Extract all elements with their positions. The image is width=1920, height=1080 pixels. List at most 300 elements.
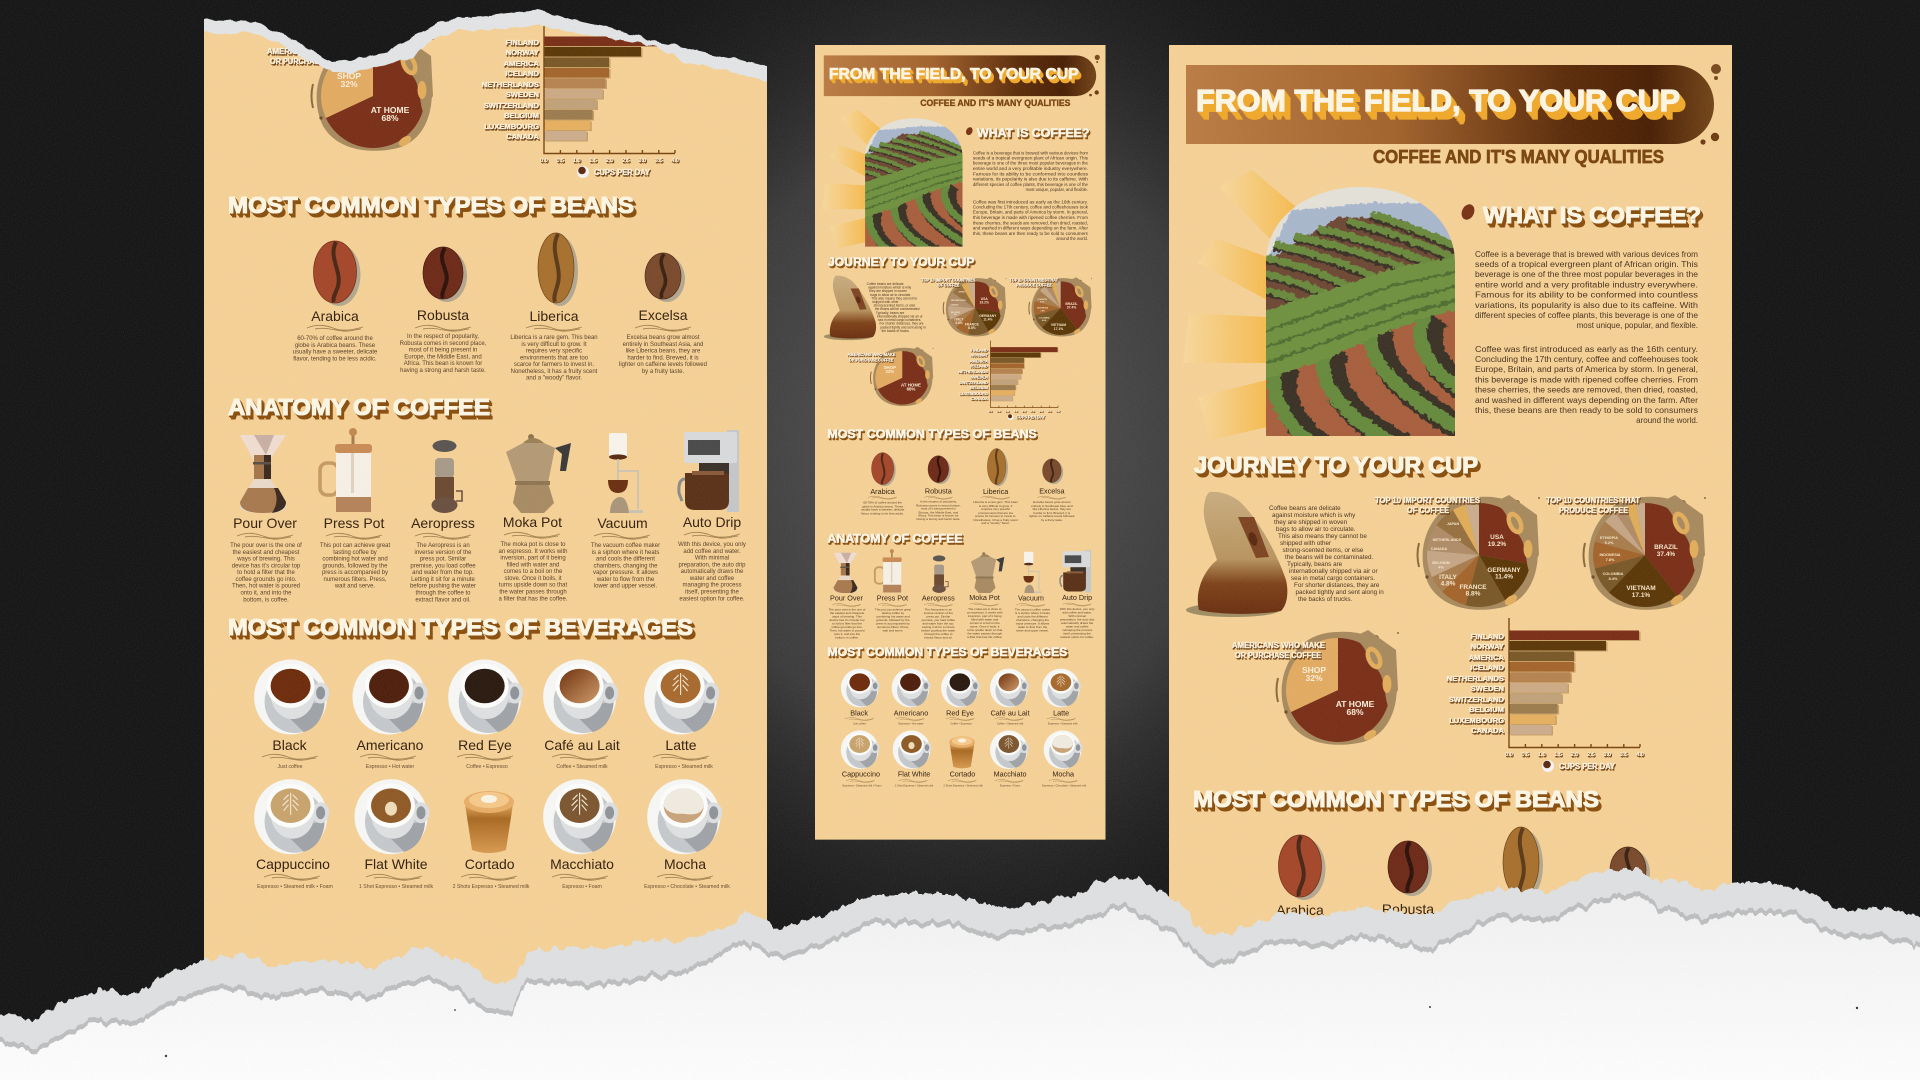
bean: Excelsa: harder to find. Brewed, it is xyxy=(1034,511,1071,515)
drink: Cortado: 2 Shots Espresso • Steamed milk xyxy=(943,783,984,787)
bean: Robusta: Africa. This bean is known for xyxy=(918,514,958,518)
drink: Black xyxy=(841,669,879,726)
brewer: Moka Pot: filled with water and xyxy=(507,562,559,568)
drink: Red Eye: Red Eye xyxy=(946,708,974,717)
brewer: Auto Drip: With this device, you only xyxy=(1060,607,1095,611)
drink: Americano xyxy=(352,660,426,770)
bean: Arabica: globe is Arabica beans. These xyxy=(862,504,903,508)
bar chart: cups per day: 4.0 xyxy=(1636,752,1644,758)
bar chart: cups per day: 2.5 xyxy=(622,158,630,164)
bar chart: cups per day: LUXEMBOURG xyxy=(1449,716,1504,725)
bar chart: cups per day: 2.0 xyxy=(1022,409,1027,413)
pie chart: top 10 import countries: GERMANY xyxy=(1487,567,1521,574)
bean: Liberica: is very difficult to grow. It xyxy=(979,504,1012,508)
sun rays xyxy=(1183,170,1296,440)
bean: Robusta: In the respect of popularity, xyxy=(920,500,957,504)
bar chart: cups per day: 1.0 xyxy=(1538,752,1546,758)
brewer: Aeropress: premise, you load coffee xyxy=(922,618,955,622)
bean: Arabica: flavor, tending to be less acidic. xyxy=(293,356,377,362)
bean: Arabica: Arabica xyxy=(311,308,359,324)
text: journey description xyxy=(867,282,926,333)
bar chart: cups per day: 1.0 xyxy=(573,158,581,164)
pie chart: make or purchase coffee: 68% xyxy=(1346,707,1364,717)
drink: Black: Black xyxy=(850,708,868,717)
bean: Robusta xyxy=(916,456,961,521)
bean: Liberica: Nonetheless, it has a fruity scent xyxy=(511,369,598,375)
bean: Robusta xyxy=(400,247,487,374)
heading: anatomy of coffee: ANATOMY OF COFFEE xyxy=(228,394,490,420)
brewer: Auto Drip: add coffee and water. xyxy=(683,549,741,555)
drink: Red Eye: Red Eye xyxy=(458,737,512,753)
text: journey description: shipped with other xyxy=(872,300,900,304)
text: what is coffee paragraph 2: this beverage is made with ripened coffee cherries. From xyxy=(973,215,1089,220)
pie chart: top 10 import countries: JAPAN xyxy=(958,291,965,294)
bean: Arabica: Arabica xyxy=(870,487,896,496)
pie chart: top 10 producing countries: INDONESIA xyxy=(1037,307,1049,310)
drink: Cortado: 2 Shots Espresso • Steamed milk xyxy=(453,884,530,890)
pie chart: top 10 import countries: FRANCE xyxy=(1459,584,1487,591)
brewer: Vacuum: Vacuum xyxy=(1018,594,1044,603)
bar chart: cups per day: AMERICA xyxy=(1469,653,1505,662)
drink: Flat White: 1 Shot Espresso • Steamed milk xyxy=(359,884,433,890)
pie chart: top 10 import countries: 11.4% xyxy=(983,317,993,321)
text: journey description: they are shipped in woven xyxy=(869,289,907,293)
pie chart: make or purchase coffee: AT HOME xyxy=(901,383,921,388)
text: what is coffee paragraph 2: this, these beans are then ready to be sold to consumers xyxy=(973,231,1088,236)
brewer: Press Pot: combining hot water and xyxy=(876,615,910,619)
brewer: Pour Over: device has it's circular top xyxy=(232,563,301,569)
brewer: Vacuum: water to flow from the xyxy=(596,577,655,583)
text: what is coffee paragraph 1: beverage is one of the three most popular beverages in the xyxy=(973,161,1089,166)
bar chart: cups per day: CANADA xyxy=(1471,726,1505,735)
bean: Arabica xyxy=(1276,835,1326,918)
pie chart: top 10 import countries: BELGIUM xyxy=(1432,561,1450,565)
bar chart: cups per day xyxy=(482,24,679,178)
brewer: Aeropress: Aeropress xyxy=(922,594,955,603)
pie chart: top 10 producing countries xyxy=(1010,277,1092,336)
text: journey description: Coffee beans are delicate xyxy=(1269,505,1341,512)
drink: Cafe au Lait xyxy=(990,669,1030,726)
text: what is coffee paragraph 2: and washed in different ways depending on the farm. After xyxy=(973,226,1089,231)
text: what is coffee paragraph 1: entire world and a very profitable industry everywhere. xyxy=(973,166,1088,171)
text: what is coffee paragraph 2: around the world. xyxy=(1056,236,1088,241)
pie chart: make or purchase coffee: AT HOME xyxy=(371,105,410,115)
text: what is coffee paragraph 1: most unique, popular, and flexible. xyxy=(1577,321,1698,330)
coffee farm arch illustration xyxy=(859,113,969,254)
bean: Excelsa xyxy=(619,253,707,375)
bar chart: cups per day: NORWAY xyxy=(1471,642,1504,651)
brewer: Auto Drip: With minimal xyxy=(1068,614,1086,618)
bar chart: cups per day: CANADA xyxy=(971,396,988,401)
pie chart: top 10 import countries: NETHERLANDS xyxy=(1433,538,1462,542)
drink: Mocha: Espresso • Chocolate • Steamed milk xyxy=(644,884,730,890)
pie chart: top 10 producing countries: VIETNAM xyxy=(1051,323,1066,327)
bean: Robusta: Africa. This bean is known for xyxy=(404,361,482,367)
bar chart: cups per day: 4.0 xyxy=(1056,409,1060,413)
brewer: Press Pot: press is accompanied by xyxy=(322,570,388,576)
header banner xyxy=(824,55,1100,96)
drink: Mocha xyxy=(1042,730,1087,787)
brewer: Press Pot: grounds, followed by the xyxy=(876,618,910,622)
bar chart: cups per day: 0.5 xyxy=(557,158,564,164)
pie chart: top 10 producing countries: 7.8% xyxy=(1606,558,1615,562)
heading: what is coffee: WHAT IS COFFEE? xyxy=(1483,202,1701,228)
brewer: Pour Over: The pour over is the one of xyxy=(230,543,302,549)
brewer: Vacuum: lower and upper vessel. xyxy=(1016,629,1049,633)
drink: Red Eye xyxy=(941,669,979,726)
brewer: Moka Pot: comes to a boil on the xyxy=(504,569,563,575)
pie chart: top 10 producing countries: 7.8% xyxy=(1040,310,1045,312)
brewer: Aeropress: Letting it sit for a minute xyxy=(922,625,955,629)
pie chart: top 10 import countries: JAPAN xyxy=(1447,522,1460,526)
bar chart: cups per day: ICELAND xyxy=(970,363,988,368)
bar chart: cups per day: CUPS PER DAY xyxy=(1559,762,1616,771)
text: what is coffee paragraph 2: this beverage is made with ripened coffee cherries. From xyxy=(1475,376,1698,384)
brewer: Vacuum: chambers, changing the xyxy=(1016,618,1049,622)
text: what is coffee paragraph 2: Concluding the 17th century, coffee and coffeehouses took xyxy=(1475,355,1699,364)
bar chart: cups per day: 1.5 xyxy=(589,158,597,164)
brewer: Aeropress: premise, you load coffee xyxy=(410,563,476,569)
bar chart: cups per day: AMERICA xyxy=(970,358,988,363)
text: journey description: the backs of trucks. xyxy=(882,329,910,333)
icon: bean bullet xyxy=(965,126,974,136)
bean: Excelsa: entirely in Southeast Asia, and xyxy=(623,342,703,348)
text: journey description: For shorter distances, they are xyxy=(880,322,924,326)
pie chart: top 10 producing countries: 5.2% xyxy=(1605,541,1614,545)
heading: journey to your cup: JOURNEY TO YOUR CUP xyxy=(1194,452,1478,478)
bar chart: cups per day: NETHERLANDS xyxy=(958,369,988,374)
bean: Robusta: In the respect of popularity, xyxy=(407,334,479,340)
pie chart: top 10 import countries: 19.2% xyxy=(980,301,989,305)
text: journey description: strong-scented items, or else xyxy=(1282,547,1364,554)
brewer: Pour Over: the easiest and cheapest xyxy=(830,611,864,615)
brewer: Aeropress: extract flavor and oil. xyxy=(924,636,953,640)
drink: Mocha: Mocha xyxy=(1052,770,1075,779)
bar chart: cups per day: SWITZERLAND xyxy=(959,380,988,385)
brewer: Press Pot: Press Pot xyxy=(324,515,384,531)
bar chart: cups per day: CUPS PER DAY xyxy=(594,168,651,177)
bean: Robusta: Robusta comes in second place, xyxy=(916,503,961,507)
text: journey description: they are shipped in woven xyxy=(1274,519,1348,526)
brewer: Moka Pot: inversion, part of it being xyxy=(968,614,1002,618)
brewer: Vacuum: is a siphon where it heats xyxy=(1015,611,1050,615)
brewer: Vacuum: The vacuum coffee maker xyxy=(1015,608,1050,612)
pie chart: make or purchase coffee: 32% xyxy=(340,79,358,89)
bean: Excelsa xyxy=(1610,847,1650,896)
brewer: Aeropress: before pushing the water xyxy=(921,629,955,633)
brewer: Vacuum: is a siphon where it heats xyxy=(592,550,659,556)
pie chart: top 10 producing countries: 17.1% xyxy=(1632,592,1650,599)
pie chart: top 10 import countries: ITALY xyxy=(1439,574,1458,581)
brewer: Moka Pot: Moka Pot xyxy=(503,514,562,530)
brewer: Moka Pot: turns upside down so that xyxy=(967,628,1002,632)
drink: Black: Black xyxy=(272,737,308,753)
brewer: Moka Pot: filled with water and xyxy=(971,618,999,622)
brewer: Pour Over: onto it, and into the xyxy=(240,590,292,596)
text: what is coffee paragraph 1: seeds of a tropical evergreen plant of African origin. This xyxy=(973,156,1088,161)
bean: Liberica xyxy=(973,449,1018,525)
drink: Americano: Espresso • Hot water xyxy=(898,722,924,726)
text: journey description: internationally shipped via air or xyxy=(877,314,924,318)
brewer: Pour Over: ways of brewing. This xyxy=(832,615,862,619)
brewer: Vacuum: chambers, changing the xyxy=(593,563,658,569)
text: what is coffee paragraph 2 xyxy=(1475,345,1699,425)
brewer: Auto Drip: water and coffee xyxy=(689,576,735,582)
bean: Liberica: and a "woody" flavor. xyxy=(526,376,582,382)
pie chart: make or purchase coffee: 32% xyxy=(1305,673,1323,683)
drink: Latte: Latte xyxy=(665,737,697,753)
heading: most common types of beans: MOST COMMON TYPES OF BEANS xyxy=(1193,786,1599,812)
bar chart: cups per day: SWEDEN xyxy=(506,90,539,99)
drink: Cortado xyxy=(453,791,530,890)
pie chart: top 10 import countries: OF COFFEE xyxy=(938,282,960,287)
bar chart: cups per day: CUPS PER DAY xyxy=(1016,415,1045,420)
bar chart: cups per day: AMERICA xyxy=(504,59,540,68)
text: journey description: packed tightly and sent along in xyxy=(880,325,926,329)
brewer: Pour Over: coffee grounds go into. xyxy=(236,577,297,583)
bar chart: cups per day: 2.5 xyxy=(1587,752,1595,758)
brewer: Auto Drip: easiest option for coffee. xyxy=(679,596,745,602)
drink: Cortado: Cortado xyxy=(950,770,975,779)
brewer: Press Pot: wait and serve. xyxy=(334,584,376,590)
pie chart: top 10 import countries: FRANCE xyxy=(965,323,980,327)
drink: Americano: Americano xyxy=(357,737,424,753)
bean: Arabica xyxy=(293,241,378,362)
pie chart: top 10 producing countries: COLOMBIA xyxy=(1039,316,1050,319)
text: journey description: Typically, beans are xyxy=(876,311,905,315)
brewer: Auto Drip xyxy=(678,430,746,602)
brewer: Aeropress: extract flavor and oil. xyxy=(415,597,471,603)
drink: Macchiato: Espresso • Foam xyxy=(562,884,602,890)
text: journey description: bags to allow air to circulate. xyxy=(1276,526,1356,533)
text: what is coffee paragraph 2: around the world. xyxy=(1636,416,1698,425)
pie chart: top 10 import countries: CANADA xyxy=(1431,547,1447,551)
pie chart: top 10 producing countries: BRAZIL xyxy=(1065,302,1078,306)
brewer: Auto Drip: preparation, the auto drip xyxy=(1060,618,1095,622)
text: journey description: strong-scented items, or else xyxy=(874,304,915,308)
brewer: Press Pot: tasting coffee by xyxy=(333,550,377,556)
brewer: Pour Over: onto it, and into the xyxy=(834,632,860,636)
text: journey description: bags to allow air to circulate. xyxy=(870,293,911,297)
brewer: Auto Drip: itself, presenting the xyxy=(685,590,740,596)
brewer: Pour Over: Then, hot water is poured xyxy=(232,584,300,590)
drink: Black: Just coffee xyxy=(278,764,303,770)
brewer: Vacuum: Vacuum xyxy=(597,515,648,531)
bar chart: cups per day: 0.0 xyxy=(988,409,993,413)
icon: coffee sack xyxy=(824,276,876,340)
bar chart: cups per day: FINLAND xyxy=(506,38,540,47)
drink: Cafe au Lait: Coffee • Steamed milk xyxy=(997,722,1024,726)
icon: bean bullet xyxy=(1459,202,1477,222)
text: journey description: against moisture which is why xyxy=(868,286,912,290)
bean: Arabica: usually have a sweeter, delicate xyxy=(861,508,905,512)
brewer: Pour Over: to hold a filter that the xyxy=(832,622,862,626)
bean: Robusta: Robusta xyxy=(925,486,953,495)
pie chart: top 10 producing countries: ETHIOPIA xyxy=(1600,536,1618,540)
bar chart: cups per day: NETHERLANDS xyxy=(482,80,539,89)
brewer: Moka Pot: The moka pot is close to xyxy=(968,607,1002,611)
bar chart: cups per day: 1.5 xyxy=(1554,752,1562,758)
pie chart: make or purchase coffee xyxy=(848,347,934,406)
brewer: Pour Over: ways of brewing. This xyxy=(236,557,295,563)
bar chart: cups per day: FINLAND xyxy=(1471,632,1505,641)
brewer: Press Pot: numerous filters. Press, xyxy=(323,577,387,583)
pie chart: top 10 import countries: USA xyxy=(981,297,988,301)
brewer: Auto Drip: water and coffee xyxy=(1066,625,1089,629)
pie chart: top 10 import countries: 4% xyxy=(954,313,957,316)
bean: Robusta xyxy=(1382,841,1434,917)
brewer: Auto Drip: automatically draws the xyxy=(681,569,744,575)
pie chart: top 10 import countries: GERMANY xyxy=(979,314,997,318)
title: FROM THE FIELD, TO YOUR CUP xyxy=(1196,83,1680,118)
text: what is coffee paragraph 2: Europe, Britain, and parts of America by storm. In general, xyxy=(973,210,1088,215)
header banner xyxy=(1186,64,1721,145)
pie chart: make or purchase coffee xyxy=(267,36,434,151)
pie chart: top 10 producing countries: COLOMBIA xyxy=(1603,572,1624,576)
text: journey description: internationally shipped via air or xyxy=(1289,568,1378,575)
bean: Liberica xyxy=(510,233,598,382)
pie chart: make or purchase coffee: OR PURCHASE COFFEE xyxy=(270,56,356,66)
brewer: Aeropress: before pushing the water xyxy=(410,584,476,590)
text: journey description: Typically, beans are xyxy=(1287,561,1343,568)
bar chart: cups per day: 1.5 xyxy=(1014,409,1018,413)
bar chart: cups per day: NETHERLANDS xyxy=(1447,674,1504,683)
bean: Liberica: environments that are too xyxy=(520,356,589,362)
brewer: Auto Drip: managing the process xyxy=(682,583,742,589)
brewer: Auto Drip: add coffee and water. xyxy=(1062,611,1092,615)
brewer: Aeropress: through the coffee to xyxy=(924,632,953,636)
bar chart: cups per day: 0.0 xyxy=(540,158,548,164)
pie chart: top 10 import countries: 4% xyxy=(1438,566,1444,570)
pie chart: make or purchase coffee: 68% xyxy=(381,113,399,123)
pie chart: top 10 producing countries: 8.4% xyxy=(1609,577,1618,581)
brewer: Aeropress: press pot. Similar xyxy=(420,557,466,563)
drink: Latte xyxy=(644,660,717,770)
text: journey description: For shorter distances, they are xyxy=(1294,582,1380,589)
brewer: Vacuum: water to flow from the xyxy=(1018,625,1047,629)
brewer: Pour Over: device has it's circular top xyxy=(829,618,865,622)
panel: middle poster, full view xyxy=(815,45,1106,840)
brewer: Vacuum: vapor pressure. It allows xyxy=(1016,622,1050,626)
drink: Latte: Latte xyxy=(1053,708,1069,717)
text: journey description: against moisture which is why xyxy=(1272,512,1356,519)
brewer: Aeropress: inverse version of the xyxy=(924,611,953,615)
brewer: Moka Pot: comes to a boil on the xyxy=(970,621,1000,625)
brewer: Aeropress: and water from the top. xyxy=(922,622,954,626)
bar chart: cups per day: NORWAY xyxy=(506,48,539,57)
pie chart: top 10 producing countries: INDONESIA xyxy=(1599,553,1621,557)
panel: left poster, scrolled to lower half xyxy=(204,0,767,1011)
bar chart: cups per day: ICELAND xyxy=(1470,663,1505,672)
bar chart: cups per day: SWEDEN xyxy=(971,374,988,379)
text: what is coffee paragraph 2: and washed in different ways depending on the farm. After xyxy=(1475,396,1698,405)
text: journey description: This also means they cannot be xyxy=(871,296,917,300)
subtitle: COFFEE AND IT'S MANY QUALITIES xyxy=(920,98,1070,108)
pie chart: top 10 import countries xyxy=(1375,495,1540,610)
bean: Robusta: most of it being present in xyxy=(921,507,956,511)
drink: Latte: Espresso • Steamed milk xyxy=(655,764,713,770)
brewer: Moka Pot: turns upside down so that xyxy=(499,583,568,589)
pie chart: top 10 producing countries: VIETNAM xyxy=(1626,585,1656,592)
bar chart: cups per day: 4.0 xyxy=(671,158,679,164)
pie chart: make or purchase coffee: AMERICANS WHO MAKE xyxy=(848,352,896,357)
bar chart: cups per day: BELGIUM xyxy=(970,385,988,390)
text: what is coffee paragraph 2: Coffee was first introduced as early as the 16th century. xyxy=(973,199,1088,204)
drink: Latte: Espresso • Steamed milk xyxy=(1048,722,1078,726)
drink: Red Eye: Coffee • Espresso xyxy=(466,764,508,770)
drink: Flat White: Flat White xyxy=(364,856,428,872)
brewer: Pour Over: bottom, is coffee. xyxy=(835,636,859,640)
pie chart: top 10 import countries: TOP 10 IMPORT COUNTRIES xyxy=(921,277,976,282)
brewer: Moka Pot: the water passes through xyxy=(499,590,567,596)
bean: Liberica: Liberica is a rare gem. This bean xyxy=(510,335,598,341)
pie chart: top 10 import countries: 11.4% xyxy=(1495,574,1513,580)
bar chart: cups per day: ICELAND xyxy=(505,69,540,78)
text: what is coffee paragraph 2: this, these beans are then ready to be sold to consumers xyxy=(1475,406,1698,415)
pie chart: top 10 import countries: BELGIUM xyxy=(951,312,960,314)
brewer: Press Pot: wait and serve. xyxy=(883,629,903,633)
brewer: Aeropress: and water from the top. xyxy=(412,570,474,576)
pie chart: top 10 producing countries: TOP 10 COUNTRIES THAT xyxy=(1010,277,1058,282)
bar chart: cups per day: 2.0 xyxy=(1571,752,1578,758)
pie chart: top 10 import countries: 19.2% xyxy=(1488,541,1506,548)
pie chart: make or purchase coffee: SHOP xyxy=(1302,665,1326,675)
bar chart: cups per day: NORWAY xyxy=(971,353,988,358)
text: what is coffee paragraph 1: most unique, popular, and flexible. xyxy=(1026,187,1088,192)
pie chart: top 10 producing countries: 17.1% xyxy=(1054,327,1063,331)
pie chart: make or purchase coffee: SHOP xyxy=(884,365,896,370)
drink: Latte xyxy=(1042,669,1080,726)
brewer: Aeropress xyxy=(921,555,955,640)
drink: Flat White xyxy=(354,779,433,890)
bar chart: cups per day: 3.5 xyxy=(1048,409,1052,413)
pie chart: top 10 import countries: 4.8% xyxy=(1441,580,1456,588)
text: journey description: packed tightly and sent along in xyxy=(1296,589,1384,596)
bean: Liberica xyxy=(1503,827,1543,900)
torn white paper foreground xyxy=(0,867,1920,1080)
drink: Macchiato: Macchiato xyxy=(994,770,1027,779)
drink: Cappuccino: Cappuccino xyxy=(842,770,880,779)
bean: Excelsa: harder to find. Brewed, it is xyxy=(627,356,699,362)
brewer: Aeropress: press pot. Similar xyxy=(926,615,950,619)
brewer: Aeropress: Aeropress xyxy=(411,515,475,531)
drink: Red Eye xyxy=(448,660,521,770)
bean: Excelsa: Excelsa xyxy=(638,307,688,323)
drink: Americano: Espresso • Hot water xyxy=(366,764,415,770)
drink: Cortado xyxy=(943,736,984,787)
text: what is coffee paragraph 2: these cherries, the seeds are removed, then dried, roasted, xyxy=(1475,386,1698,394)
bean: Robusta: Europe, the Middle East, and xyxy=(404,354,482,360)
drink: Cafe au Lait: Coffee • Steamed milk xyxy=(556,764,608,770)
brewer: Moka Pot xyxy=(498,434,571,602)
text: what is coffee paragraph 2: Europe, Britain, and parts of America by storm. In general, xyxy=(1475,365,1698,374)
text: what is coffee paragraph 1: seeds of a tropical evergreen plant of African origin. This xyxy=(1475,260,1698,269)
text: what is coffee paragraph 1: variations, its popularity is also due to its caffeine. With xyxy=(1475,301,1698,310)
text: what is coffee paragraph 1: Coffee is a beverage that is brewed with various devices from xyxy=(973,150,1089,155)
brewer: Vacuum: and cools the different xyxy=(1017,615,1048,619)
bean: Liberica: scarce for farmers to invest in. xyxy=(514,362,595,368)
brewer: Auto Drip: preparation, the auto drip xyxy=(678,562,746,568)
brewer: Press Pot: press is accompanied by xyxy=(876,622,910,626)
brewer: Press Pot xyxy=(320,428,391,590)
text: what is coffee paragraph 2 xyxy=(973,199,1089,241)
bean: Excelsa: entirely in Southeast Asia, and xyxy=(1031,504,1073,508)
bar chart: cups per day: BELGIUM xyxy=(504,111,539,120)
brewer: Press Pot: This pot can achieve great xyxy=(875,608,911,612)
pie chart: top 10 producing countries: 5.2% xyxy=(1040,301,1045,303)
text: what is coffee paragraph 1: variations, its popularity is also due to its caffeine. With xyxy=(973,177,1089,182)
bean: Excelsa: like Liberica beans, they are xyxy=(1033,507,1071,511)
